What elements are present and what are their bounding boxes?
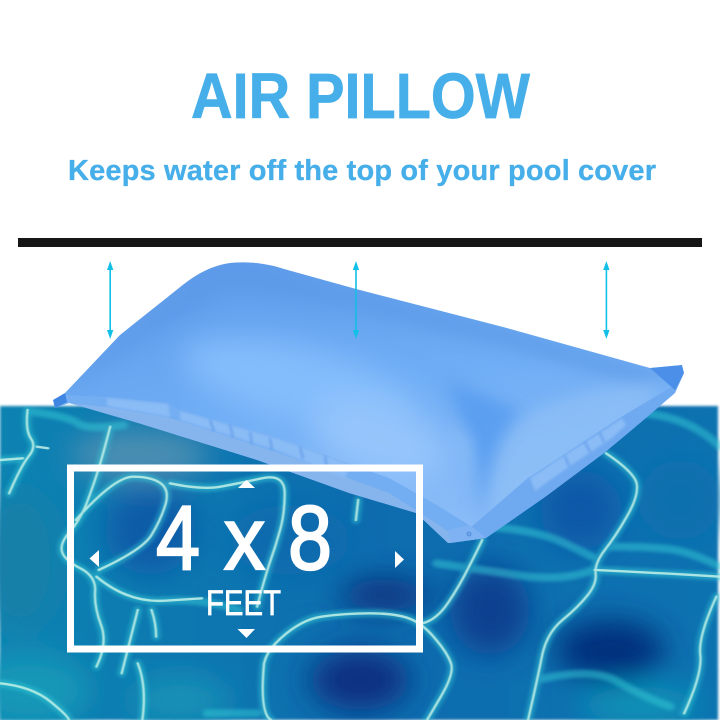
dimension 4 x 8: x: [224, 489, 265, 588]
valve: [467, 532, 471, 536]
arrow right: [603, 261, 610, 339]
caustic glow: [0, 410, 720, 720]
right lobe: [500, 382, 653, 482]
clearance arrows: [107, 261, 610, 339]
pool cover line: [18, 238, 702, 247]
left flange: [53, 395, 469, 534]
belly highlight: [182, 330, 404, 424]
right flange: [470, 373, 684, 538]
direction triangles: [90, 480, 404, 638]
dimension 4 x 8: [156, 488, 332, 589]
unit label: FEET: [206, 584, 281, 623]
valley crease: [448, 382, 520, 510]
corner: [650, 365, 684, 390]
air pillow: [53, 262, 690, 545]
size callout box: [70, 468, 420, 649]
top shading: [82, 262, 662, 382]
dimension 4 x 8: 8: [288, 488, 332, 589]
arrow center: [353, 261, 359, 339]
title: AIR PILLOW: [191, 60, 531, 132]
dimension 4 x 8: 4: [156, 488, 200, 589]
caustic lines: [0, 410, 720, 720]
under face: [69, 403, 486, 545]
subtitle: Keeps water off the top of your pool cover: [68, 155, 656, 187]
water background: [0, 406, 720, 720]
arrow left: [107, 261, 113, 339]
